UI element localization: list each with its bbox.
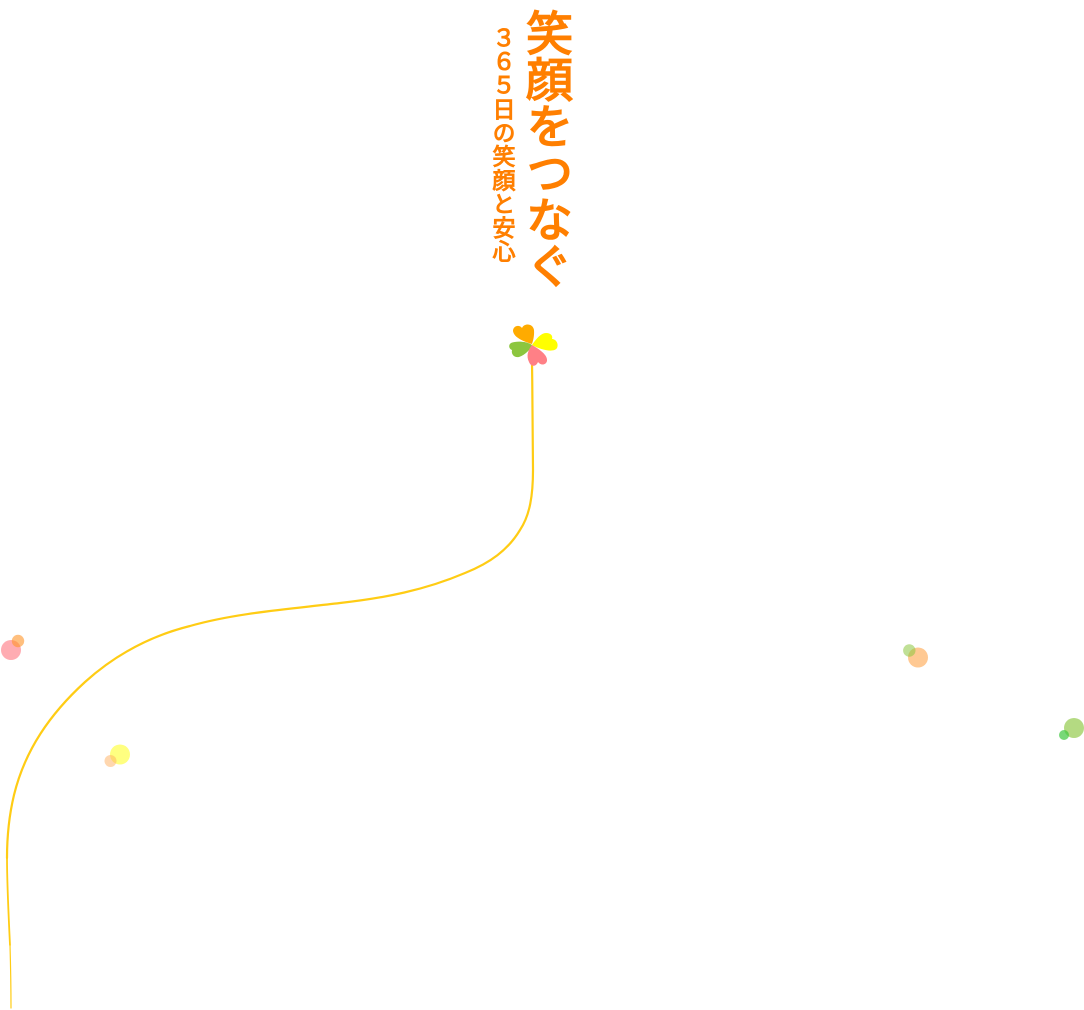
subtitle: ３６５日の笑顔と安心 bbox=[487, 26, 521, 263]
title: 笑顔をつなぐ bbox=[515, 9, 584, 289]
curved stem line bbox=[7, 362, 533, 1008]
decorative bubbles: pink and orange bbox=[1, 635, 24, 660]
decorative bubbles: orange and green bbox=[903, 644, 928, 668]
icon: four-leaf clover bbox=[509, 324, 558, 366]
decorative bubbles: green pair bbox=[1059, 718, 1084, 740]
decorative bubbles: yellow and peach bbox=[104, 744, 130, 767]
